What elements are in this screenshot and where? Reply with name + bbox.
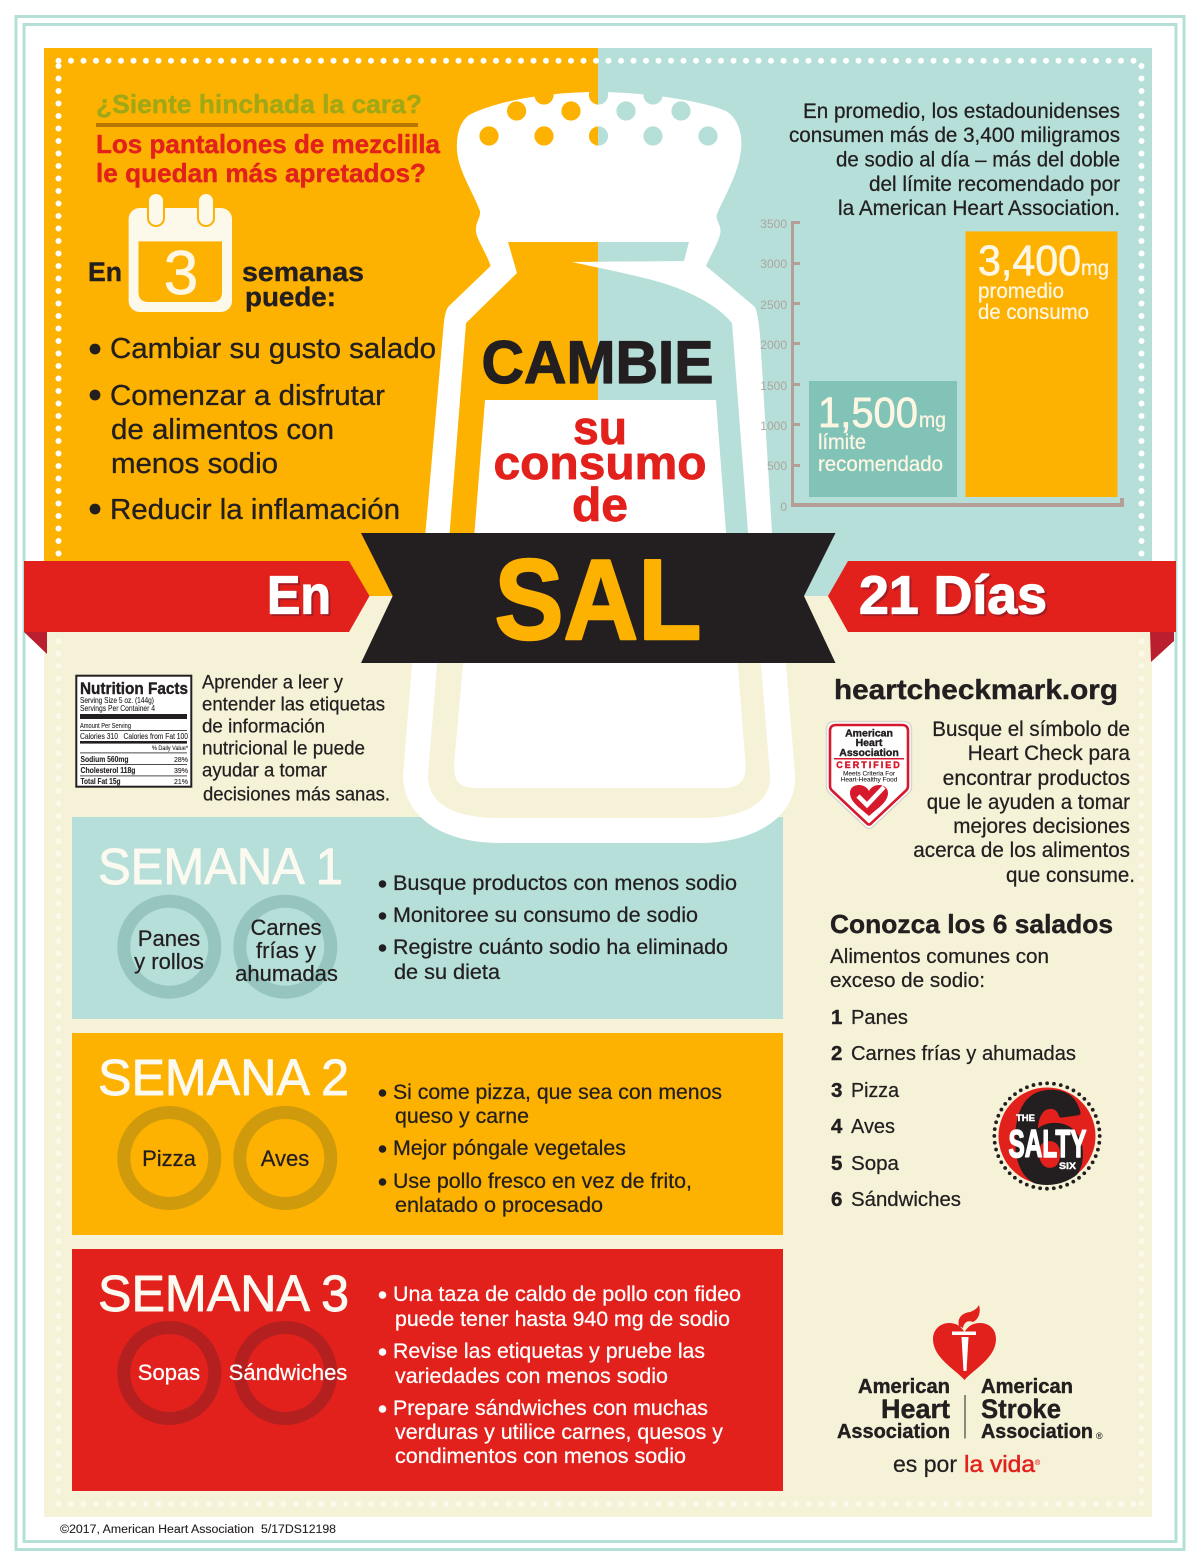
intro paragraph: sodium average: consumen más de 3,400 miligramos [789, 124, 1120, 147]
axis labels: 3500 [760, 217, 787, 231]
intro paragraph: sodium average: la American Heart Association. [838, 197, 1120, 220]
axis labels: 1000 [760, 419, 787, 433]
text: heart check [913, 718, 1135, 887]
logo: american heart association: Stroke [981, 1394, 1061, 1424]
ring: aves: Aves [261, 1146, 309, 1171]
icon: heart check badge: Meets Criteria For [843, 770, 896, 778]
question headline: le quedan más apretados? [96, 158, 426, 188]
nutrition facts label [76, 676, 191, 787]
numbered list: salty six: Panes [851, 1006, 908, 1029]
icon: heart check badge: American [845, 728, 893, 740]
text: reading labels: decisiones más sanas. [203, 784, 390, 806]
ring: pizza: Pizza [142, 1146, 197, 1171]
axis labels: 500 [767, 459, 787, 473]
numbered list: salty six: Sándwiches [851, 1188, 961, 1211]
icon: heart and torch [933, 1305, 996, 1380]
bullet list: semana 2: Si come pizza, que sea con menos [393, 1081, 722, 1104]
nutrition facts label: Cholesterol 118g [80, 766, 136, 775]
nutrition facts label: % Daily Value* [152, 746, 189, 752]
bullet list: semana 1: Registre cuánto sodio ha eliminado [393, 936, 728, 959]
bullet list: semana 3: variedades con menos sodio [395, 1365, 668, 1388]
footer copyright: ©2017, American Heart Association [60, 1524, 254, 1536]
nutrition facts label: Servings Per Container 4 [80, 704, 155, 713]
bullet list: semana 2: Mejor póngale vegetales [393, 1137, 626, 1160]
ribbon text: 21 dias: 21 Días [859, 566, 1047, 626]
icon: the salty six: THE [1016, 1113, 1035, 1124]
intro paragraph: sodium average: En promedio, los estadounidenses [803, 100, 1120, 123]
icon: the salty six: SALTY [1008, 1123, 1086, 1166]
ring: aves [240, 1112, 331, 1204]
ring: sopas [124, 1328, 215, 1418]
nutrition facts label: 28% [174, 757, 188, 764]
numbered list: salty six: 5 [831, 1152, 842, 1175]
logo: american heart association: Association [837, 1421, 950, 1443]
bullet list: benefits: de alimentos con [111, 414, 334, 446]
bullet list: semana 2: queso y carne [395, 1105, 529, 1128]
text: heart check: Heart Check para [968, 742, 1130, 765]
bar: average intake: de consumo [978, 301, 1089, 324]
ring: carnes frias y ahumadas [235, 901, 338, 992]
bar: recommended limit: límite [818, 431, 866, 454]
bullet list: semana 3: puede tener hasta 940 mg de sodio [395, 1308, 730, 1331]
axis labels: 2500 [760, 298, 787, 312]
bullet list: semana 2: enlatado o procesado [395, 1194, 603, 1217]
shaker holes [479, 85, 718, 146]
title: su consumo de: su [573, 401, 627, 454]
axis labels: 2000 [760, 338, 787, 352]
bar chart: sodium [760, 217, 1124, 514]
axis labels: 1500 [760, 379, 787, 393]
icon: the salty six: SIX [1059, 1161, 1077, 1172]
ring: sandwiches: Sándwiches [229, 1360, 347, 1385]
intro paragraph: sodium average: de sodio al día – más del doble [836, 148, 1120, 172]
panel: semana 2 [72, 1033, 783, 1235]
panel: semana 1 [72, 817, 783, 1019]
banner text: sal: SAL [494, 537, 702, 664]
en 3 semanas puede [88, 192, 364, 312]
nutrition facts label: Nutrition Facts [80, 679, 188, 698]
text: common foods intro [830, 945, 1049, 992]
bar: recommended limit [809, 381, 957, 497]
ring: panes y rollos: Panes [138, 926, 200, 951]
nutrition facts label: Sodium 560mg [80, 755, 129, 764]
bullet list: semana 3: Revise las etiquetas y pruebe las [393, 1340, 705, 1363]
panel: semana 3 [72, 1249, 783, 1491]
bar: average intake: mg [1081, 257, 1109, 280]
text: heart check: que le ayuden a tomar [927, 791, 1130, 814]
ring: carnes frias y ahumadas: Carnes [251, 915, 321, 940]
axis labels [760, 217, 787, 514]
title: su consumo de [494, 401, 706, 531]
ring: sandwiches [229, 1328, 347, 1418]
text: heart check: que consume. [1006, 864, 1135, 887]
numbered list: salty six: 1 [831, 1006, 842, 1029]
numbered list: salty six: 4 [831, 1115, 843, 1138]
nutrition facts label: Amount Per Serving [80, 723, 131, 730]
bullet list: semana 3: Prepare sándwiches con muchas [393, 1397, 708, 1420]
icon: the salty six [992, 1081, 1102, 1191]
question headline: Los pantalones de mezclilla [96, 129, 441, 159]
text: reading labels: nutricional le puede [202, 738, 365, 760]
icon: heart check badge: CERTIFIED [836, 760, 902, 770]
bullet list: semana 1 [379, 872, 737, 984]
text: common foods intro: exceso de sodio: [830, 969, 985, 992]
text: heart check: mejores decisiones [953, 815, 1130, 838]
bullet list: semana 3: verduras y utilice carnes, quesos y [395, 1421, 723, 1444]
numbered list: salty six: Sopa [851, 1152, 900, 1175]
text: reading labels: entender las etiquetas [202, 695, 385, 716]
ring: panes y rollos [124, 901, 215, 992]
bar: recommended limit: mg [919, 409, 946, 432]
numbered list: salty six [831, 1006, 1076, 1211]
logo: american heart association: American [858, 1376, 950, 1398]
bullet list: semana 1: Monitoree su consumo de sodio [393, 904, 698, 927]
heading: semana 3: SEMANA 3 [98, 1265, 349, 1322]
numbered list: salty six: 6 [831, 1188, 842, 1211]
en 3 semanas puede: puede: [245, 282, 336, 312]
ring: carnes frias y ahumadas: ahumadas [235, 961, 338, 986]
heading: semana 2: SEMANA 2 [98, 1049, 349, 1106]
en 3 semanas puede: semanas [242, 257, 364, 287]
bullet list: benefits: menos sodio [111, 448, 278, 480]
ribbon: left [24, 561, 370, 654]
question headline [96, 89, 441, 188]
title: su consumo de: consumo [494, 436, 706, 489]
en 3 semanas puede: En [88, 257, 122, 287]
icon: heart check badge: Heart [856, 737, 883, 749]
text: reading labels: de información [202, 716, 325, 738]
nutrition facts label: 21% [174, 779, 188, 786]
chart axes [791, 221, 1124, 507]
nutrition facts label: Serving Size 5 oz. (144g) [80, 696, 154, 705]
heading: semana 1: SEMANA 1 [98, 838, 343, 895]
bar: average intake: 3,400 [978, 237, 1081, 285]
numbered list: salty six: Pizza [851, 1079, 900, 1102]
bullet list: semana 3: Una taza de caldo de pollo con fideo [393, 1283, 741, 1306]
intro paragraph: sodium average [789, 100, 1120, 220]
bar: average intake: promedio [978, 280, 1064, 303]
heading: heartcheckmark.org: heartcheckmark.org [834, 674, 1118, 705]
text: reading labels: ayudar a tomar [202, 761, 328, 782]
text: common foods intro: Alimentos comunes con [830, 945, 1049, 968]
text: heart check: acerca de los alimentos [913, 839, 1130, 862]
logo: american heart association: es por [893, 1451, 957, 1477]
bar: recommended limit: recomendado [818, 453, 943, 476]
numbered list: salty six: Carnes frías y ahumadas [851, 1042, 1076, 1065]
bullet list: benefits: Cambiar su gusto salado [110, 333, 436, 365]
icon: heart check badge [826, 722, 912, 828]
logo: american heart association: Association [981, 1421, 1093, 1443]
bullet list: semana 2: Use pollo fresco en vez de frito, [393, 1170, 692, 1193]
icon: the salty six: 6 [1013, 1065, 1085, 1211]
ring: pizza [124, 1112, 215, 1204]
bar: average intake [966, 231, 1118, 497]
bullet list: semana 3 [379, 1283, 741, 1468]
numbered list: salty six: Aves [851, 1115, 895, 1138]
logo: american heart association: ® [1096, 1431, 1103, 1441]
title: su consumo de: de [572, 478, 628, 531]
logo: american heart association [837, 1305, 1103, 1477]
bullet list: semana 2 [379, 1081, 722, 1217]
icon: calendar: 3 [164, 239, 198, 308]
bullet list: benefits: Comenzar a disfrutar [110, 380, 385, 412]
ring: panes y rollos: y rollos [134, 949, 204, 974]
footer copyright [60, 1524, 336, 1536]
bullet list: semana 3: condimentos con menos sodio [395, 1445, 686, 1468]
bullet list: benefits [90, 333, 436, 526]
footer copyright: 5/17DS12198 [261, 1524, 336, 1536]
heading: conozca los 6 salados: Conozca los 6 salados [830, 909, 1113, 939]
nutrition facts label: Calories from Fat 100 [124, 732, 188, 741]
bullet list: benefits: Reducir la inflamación [110, 494, 400, 526]
axis labels: 3000 [760, 257, 787, 271]
ring: carnes frias y ahumadas: frías y [256, 938, 316, 963]
black banner [361, 533, 836, 664]
title: cambie: CAMBIE [482, 329, 714, 396]
icon: heart check badge: Heart-Healthy Food [841, 776, 898, 784]
text: heart check: Busque el símbolo de [932, 718, 1130, 741]
nutrition facts label: Calories 310 [80, 732, 118, 741]
ribbon: right [828, 561, 1176, 662]
numbered list: salty six: 3 [831, 1079, 842, 1102]
icon: calendar [129, 192, 232, 312]
nutrition facts label: Total Fat 15g [80, 777, 121, 786]
intro paragraph: sodium average: del límite recomendado por [869, 173, 1120, 196]
text: reading labels: Aprender a leer y [202, 672, 343, 694]
text: reading labels [202, 672, 390, 806]
logo: american heart association: ® [1035, 1459, 1041, 1467]
bullet list: semana 1: Busque productos con menos sodio [393, 872, 737, 895]
numbered list: salty six: 2 [831, 1042, 842, 1065]
bullet list: semana 1: de su dieta [394, 961, 500, 984]
salt shaker illustration [400, 85, 800, 843]
logo: american heart association: American [981, 1376, 1073, 1398]
logo: american heart association: la vida [964, 1451, 1035, 1477]
icon: heart check badge: Association [839, 747, 899, 759]
question headline: ¿Siente hinchada la cara? [96, 89, 422, 119]
ribbon text: en: En [267, 566, 331, 626]
logo: american heart association: Heart [881, 1394, 950, 1424]
bar: recommended limit: 1,500 [818, 389, 918, 437]
ring: sopas: Sopas [138, 1360, 200, 1385]
axis labels: 0 [780, 500, 787, 514]
nutrition facts label: 39% [174, 768, 188, 775]
text: heart check: encontrar productos [943, 767, 1130, 790]
